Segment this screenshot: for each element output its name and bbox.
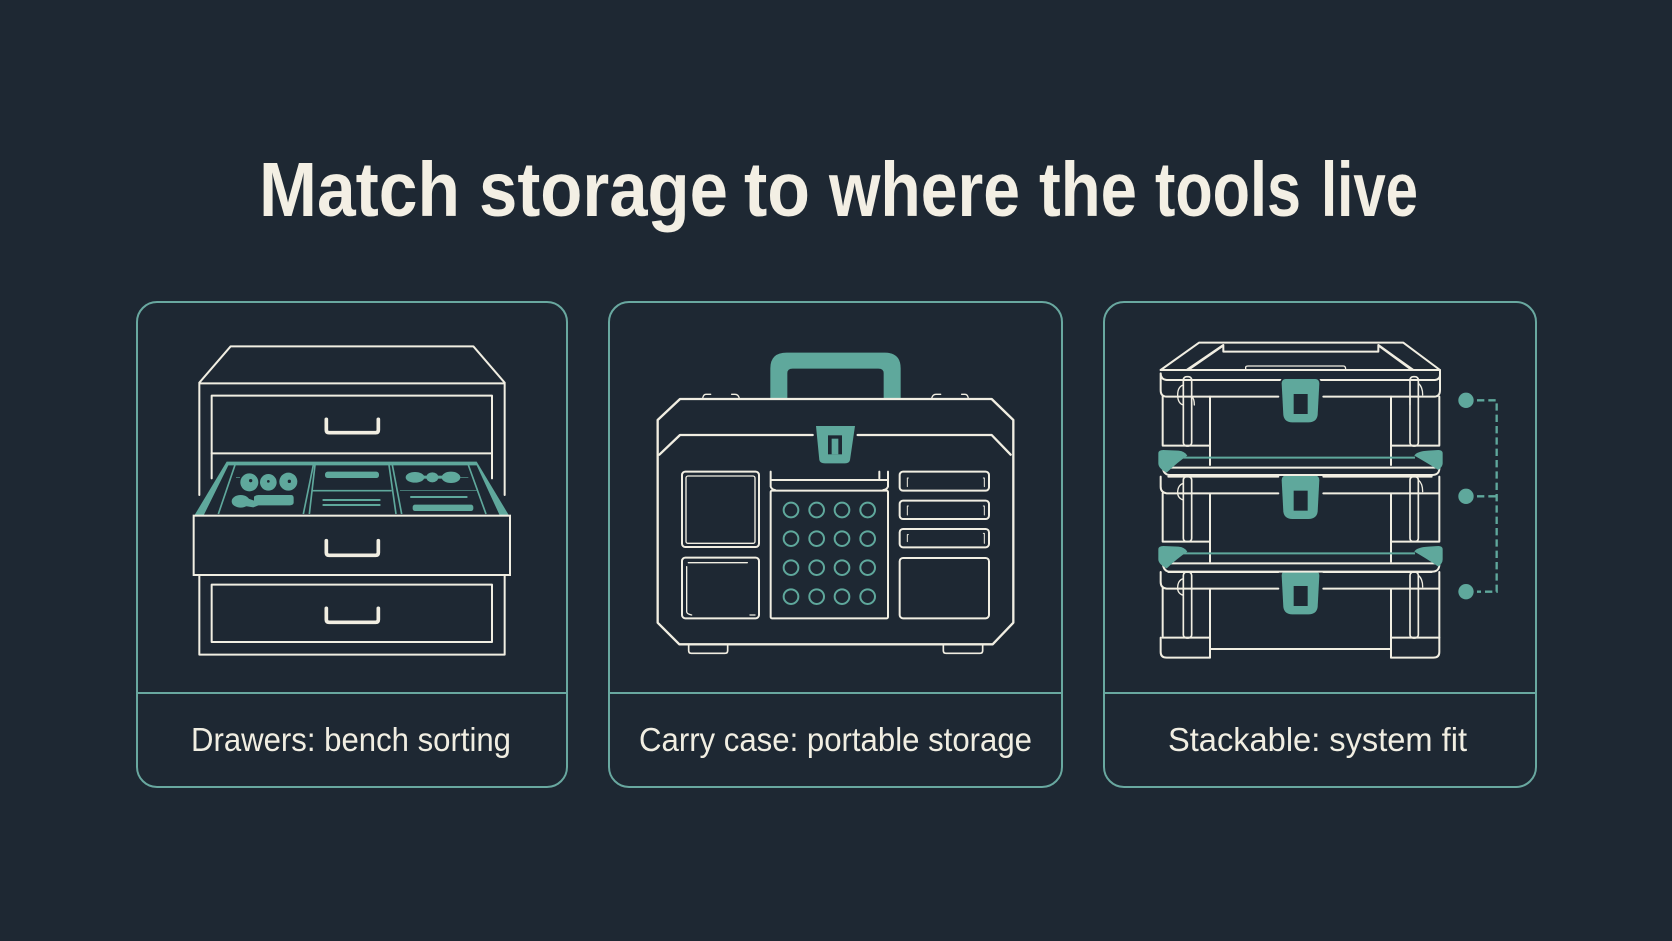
label: stackable: Stackable: system fit bbox=[1168, 721, 1467, 758]
panel: drawers bbox=[137, 302, 567, 787]
title: tools bbox=[1155, 147, 1301, 233]
title: Match bbox=[259, 147, 460, 233]
icon: stackable boxes bbox=[1158, 343, 1497, 658]
label: carry case: Carry case: portable storage bbox=[639, 721, 1032, 758]
stack connector 2 bbox=[1158, 546, 1443, 572]
stack connector 1 bbox=[1158, 450, 1443, 475]
panel: stackable bbox=[1104, 302, 1536, 787]
icon: drawer cabinet bbox=[194, 346, 510, 655]
latch bbox=[816, 426, 855, 463]
title: the bbox=[1039, 147, 1137, 233]
icon: carry case bbox=[658, 353, 1013, 653]
handle bbox=[770, 353, 901, 399]
title bbox=[259, 147, 1418, 233]
dashed fit indicator bbox=[1458, 393, 1497, 599]
box 3 bbox=[1161, 571, 1439, 658]
panel: carry case bbox=[609, 302, 1062, 787]
box 1 bbox=[1163, 377, 1439, 465]
label: drawers: Drawers: bench sorting bbox=[191, 721, 511, 758]
title: storage bbox=[479, 147, 728, 233]
lid bbox=[1161, 343, 1440, 397]
title: live bbox=[1321, 147, 1418, 233]
title: to bbox=[744, 147, 810, 233]
box 2 bbox=[1161, 476, 1439, 562]
title: where bbox=[828, 147, 1020, 233]
socket grid bbox=[784, 503, 875, 604]
open tray bbox=[194, 462, 509, 516]
